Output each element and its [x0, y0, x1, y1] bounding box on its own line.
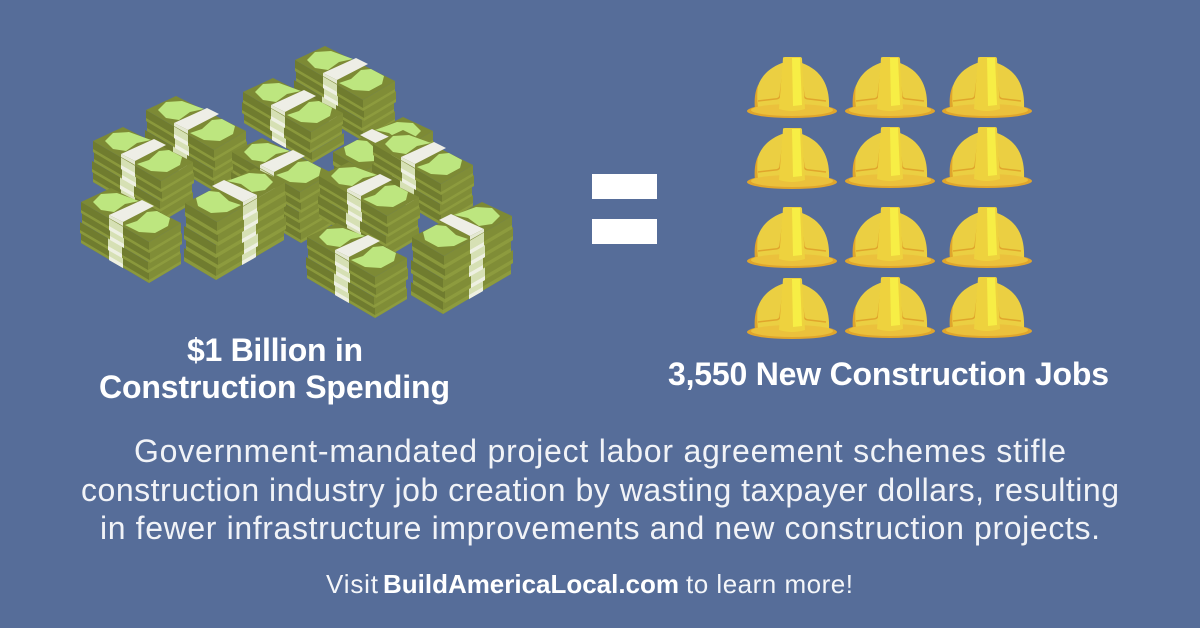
call to action	[326, 569, 853, 599]
hard hat row 3	[747, 207, 1032, 268]
call to action: to learn more!	[686, 569, 853, 599]
hard hat row 4	[747, 277, 1032, 339]
call to action: Visit	[326, 569, 379, 599]
body text: Government-mandated project labor agreement schemes stifle	[134, 433, 1066, 469]
heading: jobs: 3,550 New Construction Jobs	[668, 356, 1109, 392]
body text: in fewer infrastructure improvements and new construction projects.	[100, 510, 1100, 546]
money stack: left	[92, 127, 194, 222]
money stack: front right, rotated	[411, 202, 513, 314]
money stack: back top	[294, 46, 396, 141]
money stack: upper middle	[242, 78, 344, 163]
money stack: front left	[80, 188, 182, 283]
heading: spending: $1 Billion in	[187, 332, 363, 368]
illustration: grid of hard hats	[747, 57, 1032, 339]
heading: spending: Construction Spending	[99, 369, 450, 405]
money stack: right middle	[318, 162, 420, 257]
money stack: centre, rotated	[184, 168, 286, 280]
money stack: upper left back	[145, 96, 247, 191]
money stack: right back, rotated	[332, 117, 434, 204]
money stack: centre back	[231, 138, 333, 243]
illustration: stacks of money	[80, 46, 513, 318]
heading: spending	[99, 332, 450, 405]
hard hat row 1	[747, 57, 1032, 118]
body text: construction industry job creation by wasting taxpayer dollars, resulting	[81, 472, 1119, 508]
call to action: BuildAmericaLocal.com	[383, 569, 679, 599]
money stack: front centre	[306, 223, 408, 318]
money stack: right upper	[372, 130, 474, 225]
hard hat row 2	[747, 127, 1032, 189]
icon: equals sign	[592, 174, 657, 244]
body text	[81, 433, 1119, 546]
